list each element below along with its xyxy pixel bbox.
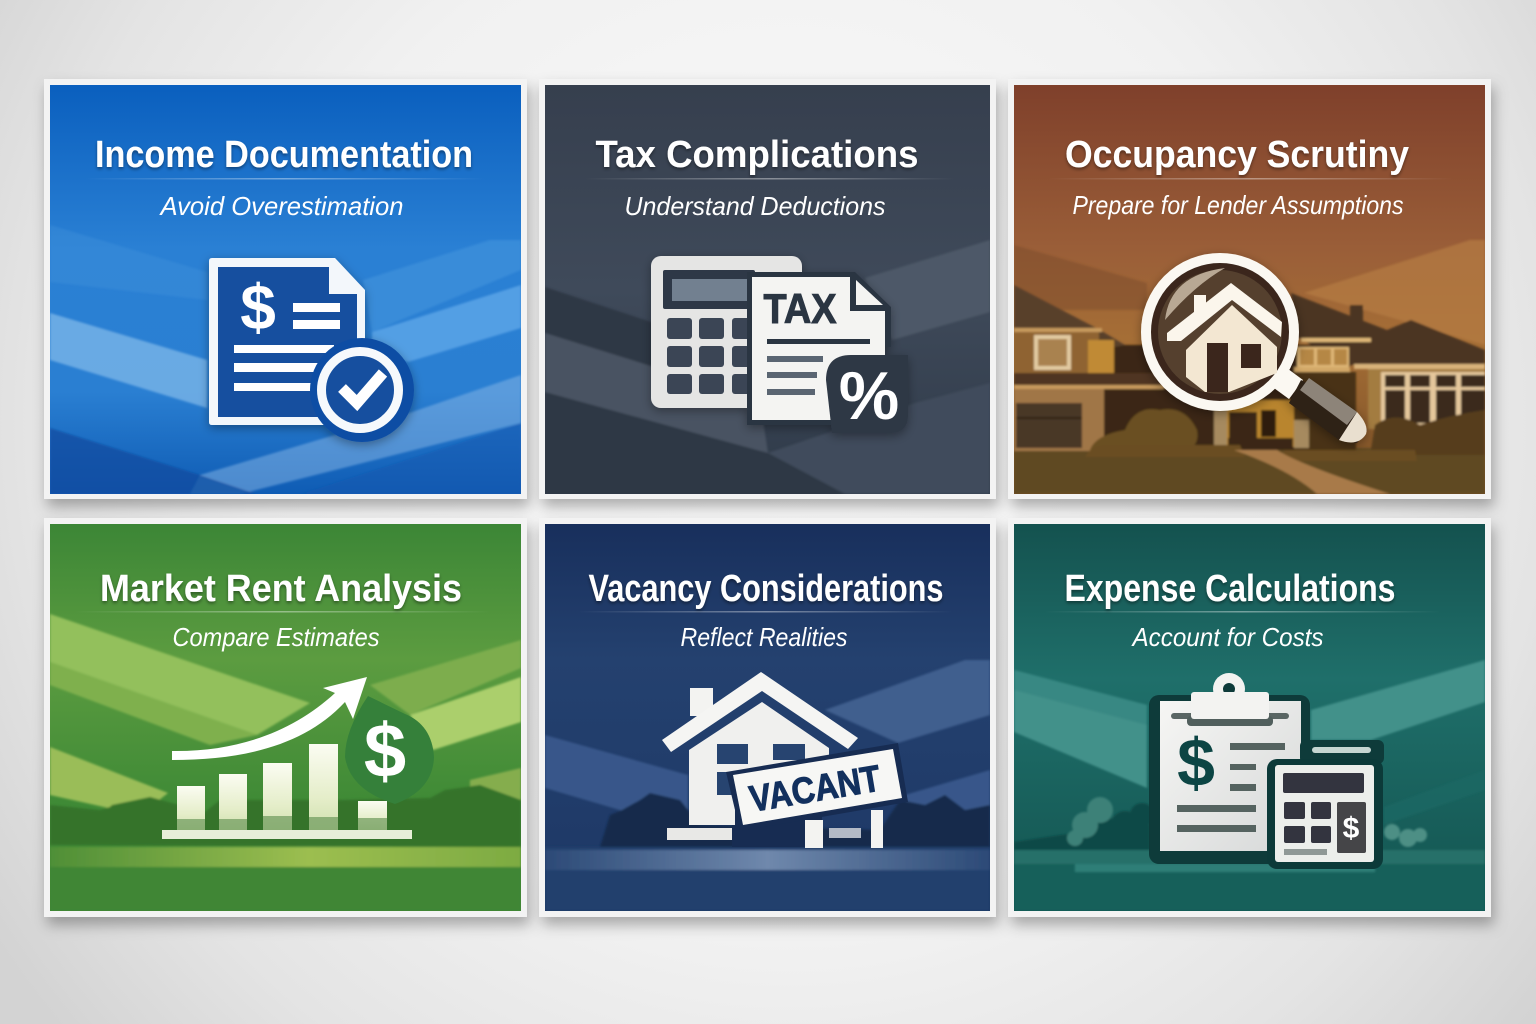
icon: vacant house with sign: VACANT	[746, 758, 884, 820]
subtitle: Reflect Realities	[680, 622, 848, 652]
subtitle: Avoid Overestimation	[159, 191, 404, 221]
panel: expense calculations	[1008, 518, 1491, 917]
subtitle: Account for Costs	[1131, 622, 1324, 652]
heading: Tax Complications	[596, 134, 918, 176]
icon: income document with check	[209, 258, 414, 442]
heading: Market Rent Analysis	[100, 568, 462, 610]
heading: Income Documentation	[95, 134, 473, 176]
heading: Expense Calculations	[1064, 568, 1396, 610]
subtitle: Understand Deductions	[624, 191, 886, 221]
icon: calculator and tax form	[651, 256, 908, 434]
icon: rising bar chart	[162, 677, 434, 839]
icon: calculator and tax form: TAX	[764, 285, 836, 332]
icon: rising bar chart: $	[364, 709, 406, 794]
icon: income document with check: $	[240, 271, 276, 343]
heading: Occupancy Scrutiny	[1065, 134, 1409, 176]
icon: magnifier over house	[1146, 258, 1367, 443]
panel: market rent analysis	[44, 518, 527, 917]
panel: occupancy scrutiny	[1008, 79, 1491, 499]
panel: tax complications	[539, 79, 996, 499]
icon: vacant house with sign	[662, 672, 908, 848]
panel: vacancy considerations	[539, 518, 996, 917]
icon: clipboard and calculator: $	[1343, 812, 1360, 845]
heading: Vacancy Considerations	[588, 568, 944, 610]
icon: calculator and tax form: %	[839, 358, 899, 434]
icon: clipboard and calculator	[1149, 673, 1384, 869]
scene: houses and lawn	[1014, 240, 1485, 494]
panel: income documentation	[44, 79, 527, 499]
subtitle: Prepare for Lender Assumptions	[1072, 190, 1404, 220]
icon: clipboard and calculator: $	[1177, 725, 1215, 801]
subtitle: Compare Estimates	[172, 622, 380, 652]
